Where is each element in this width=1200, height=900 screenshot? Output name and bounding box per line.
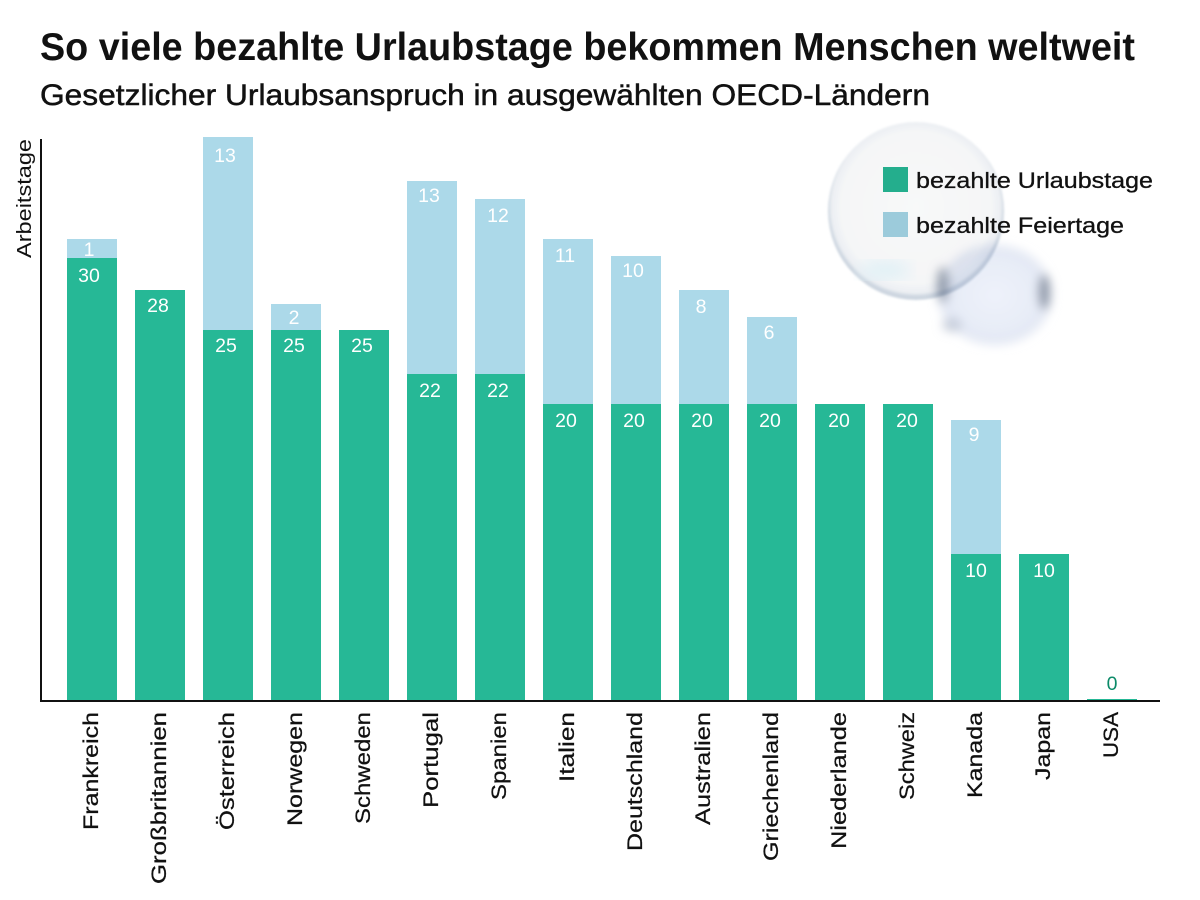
country labels: Japan: [1031, 712, 1055, 780]
bar: Portugal: 22: [419, 380, 441, 402]
country labels: Frankreich: [79, 712, 103, 830]
bar: Griechenland: 20: [759, 410, 781, 432]
stacked bar chart: [67, 137, 1137, 700]
legend label: Feiertage: bezahlte Feiertage: [916, 213, 1124, 238]
country labels: Portugal: [419, 712, 443, 808]
country labels: Großbritannien: [147, 712, 171, 884]
country labels: Kanada: [963, 712, 987, 798]
y axis line: [40, 139, 42, 702]
bar: Kanada: 9: [969, 424, 979, 446]
bar: Italien: [543, 239, 593, 700]
country labels: [79, 711, 1123, 884]
bar: Kanada: 10: [965, 560, 987, 582]
bar: Kanada: [951, 420, 1001, 700]
subtitle: Gesetzlicher Urlaubsanspruch in ausgewählten OECD-Ländern: [40, 79, 930, 112]
bar: Japan: 10: [1033, 560, 1055, 582]
bar: Griechenland: 6: [764, 322, 774, 344]
bar: Australien: 8: [696, 296, 706, 318]
bar: Deutschland: [611, 256, 661, 700]
bubble decoration: [828, 122, 1052, 345]
country labels: Schweden: [351, 712, 375, 824]
bar: Österreich: 13: [214, 145, 236, 167]
y axis label: Arbeitstage: [14, 139, 36, 258]
x axis line: [40, 700, 1160, 702]
bar: Österreich: [203, 137, 253, 700]
bar: Niederlande: 20: [828, 410, 850, 432]
bar: Norwegen: 2: [289, 307, 299, 329]
bar: Australien: [679, 290, 729, 700]
bar: Griechenland: [747, 317, 797, 700]
bar: Spanien: [475, 199, 525, 700]
bar: Portugal: [407, 181, 457, 700]
bar: USA: 0: [1107, 673, 1118, 695]
bar: Australien: 20: [691, 410, 713, 432]
bar: Spanien: 12: [487, 205, 509, 227]
country labels: Spanien: [487, 712, 511, 800]
bar: Spanien: 22: [487, 380, 509, 402]
bar: Schweiz: 20: [896, 410, 918, 432]
bar: Schweden: 25: [351, 335, 373, 357]
legend swatch: Feiertage: [883, 212, 908, 237]
bar: Japan: [1019, 554, 1069, 700]
bar: Frankreich: [67, 239, 117, 700]
country labels: Österreich: [215, 712, 239, 830]
bar: Frankreich: 30: [78, 265, 100, 287]
country labels: Griechenland: [759, 712, 783, 861]
bar: Italien: 20: [555, 410, 577, 432]
country labels: Norwegen: [283, 712, 307, 826]
bar: Österreich: 25: [215, 335, 237, 357]
bar: Großbritannien: 28: [147, 295, 169, 317]
bar: Schweden: [339, 330, 389, 700]
bar: Norwegen: [271, 304, 321, 700]
legend: [883, 167, 1153, 238]
bar: Portugal: 13: [418, 185, 440, 207]
bar: Deutschland: 20: [623, 410, 645, 432]
bar: Niederlande: [815, 404, 865, 700]
country labels: Deutschland: [623, 712, 647, 851]
bar: Norwegen: 25: [283, 335, 305, 357]
legend swatch: Urlaubstage: [883, 167, 908, 192]
country labels: Niederlande: [827, 712, 851, 849]
country labels: Schweiz: [895, 712, 919, 800]
title: So viele bezahlte Urlaubstage bekommen Menschen weltweit: [40, 26, 1135, 69]
bar: Schweiz: [883, 404, 933, 700]
country labels: Italien: [555, 712, 579, 782]
bar: Deutschland: 10: [622, 260, 644, 282]
bar: USA: [1087, 673, 1137, 700]
legend label: Urlaubstage: bezahlte Urlaubstage: [916, 168, 1153, 193]
bar: Frankreich: 1: [84, 239, 94, 261]
country labels: Australien: [691, 712, 715, 825]
bar: Großbritannien: [135, 290, 185, 700]
country labels: USA: [1099, 711, 1123, 758]
bar: Italien: 11: [555, 245, 575, 267]
